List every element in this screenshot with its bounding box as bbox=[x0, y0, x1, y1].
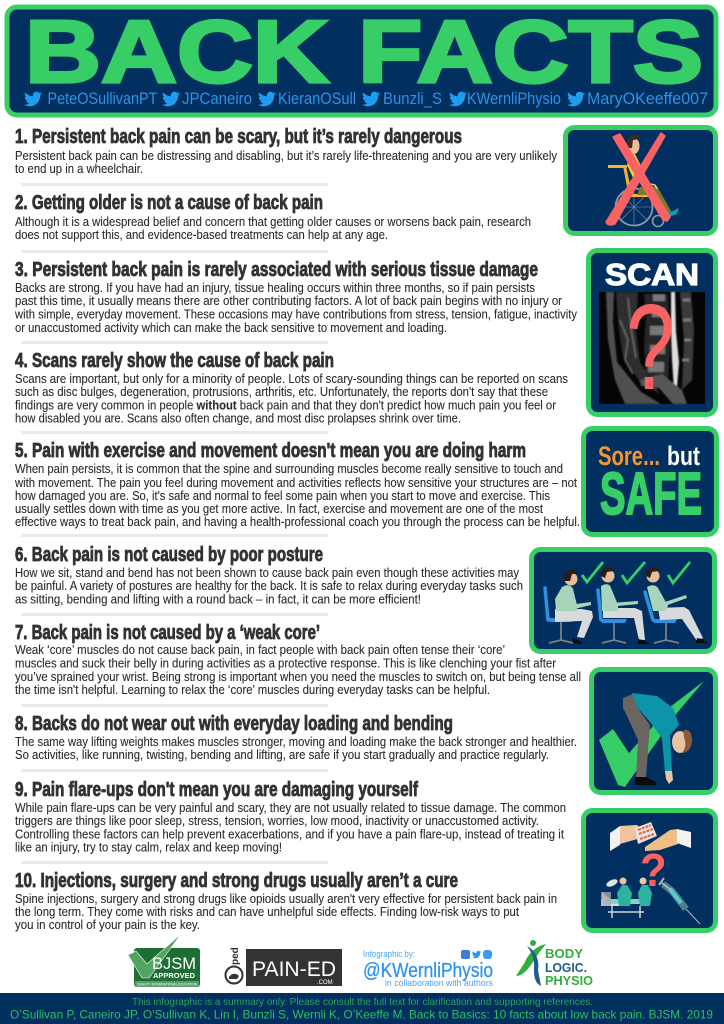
twitter handles: PeteOSullivanPT bbox=[48, 89, 158, 108]
scan heading: SCAN bbox=[605, 257, 699, 292]
fact 8: The same way lifting weights makes muscles stronger, moving and loading make the back stronger and healthier. bbox=[15, 735, 577, 749]
twitter handles: KieranOSull bbox=[278, 89, 356, 108]
fact 1 bbox=[15, 126, 558, 176]
fact 5: When pain persists, it is common that the spine and surrounding muscles become really sensitive to touch and bbox=[15, 462, 563, 476]
logo: Body Logic Physio bbox=[516, 940, 593, 988]
icon: surgical team bbox=[601, 878, 652, 918]
MRI image bbox=[599, 292, 705, 404]
fact 5: how damaged you are. So, it's safe and normal to feel some pain when you start to move and exercise. This bbox=[15, 489, 550, 503]
logo: BJSM approved bbox=[128, 934, 200, 987]
fact 3 bbox=[14, 259, 578, 335]
panel: wheelchair crossed out bbox=[566, 128, 716, 234]
icon: hand with pills bbox=[610, 822, 691, 851]
fact 6 bbox=[15, 544, 523, 606]
footer bar: This infographic is a summary only. Please consult the full text for clarification and supporting references. bbox=[132, 996, 593, 1008]
logo: Pain-Ed: .COM bbox=[317, 980, 333, 986]
logo: BJSM approved: QUALITY INTERNATIONAL EDUCATION bbox=[137, 982, 197, 986]
logo: BJSM approved: APPROVED bbox=[153, 973, 195, 980]
fact 5: usually settles down with time as you get more active. In fact, exercise and movement are one of the most bbox=[15, 502, 543, 516]
fact 8 bbox=[15, 713, 577, 762]
fact 10: the long term. They come with risks and can have unhelpful side effects. Finding low-risk ways to put bbox=[15, 905, 519, 919]
logo: Body Logic Physio: LOGIC. bbox=[545, 960, 587, 975]
fact 7: muscles and suck their belly in during activities as a protective response. This is like clenching your fist after bbox=[15, 656, 556, 670]
fact 7: the time isn't helpful. Learning to relax the ‘core’ muscles during everyday tasks can be helpful. bbox=[15, 683, 490, 697]
fact 10: you in control of your pain is the key. bbox=[15, 918, 200, 932]
credit: infographic by: Infographic by: bbox=[363, 949, 415, 960]
fact 3: Backs are strong. If you have had an injury, tissue healing occurs within three months, so if pain persists bbox=[15, 281, 535, 295]
fact 10 bbox=[15, 870, 557, 932]
fact 10: Spine injections, surgery and strong drugs like opioids usually aren't very effective for persistent back pain in bbox=[15, 892, 557, 906]
fact 1: 1. Persistent back pain can be scary, but it’s rarely dangerous bbox=[15, 126, 462, 148]
question mark: ? bbox=[640, 844, 667, 896]
credit: infographic by: @KWernliPhysio bbox=[363, 960, 493, 982]
logo: Body Logic Physio: PHYSIO bbox=[545, 973, 593, 988]
logo: Body Logic Physio: BODY bbox=[545, 946, 583, 961]
icon: bending person bbox=[623, 693, 692, 785]
title: BACK FACTS bbox=[25, 2, 703, 101]
but text: but bbox=[667, 441, 700, 471]
fact 5: with movement. The pain you feel during movement and activities reflects how sensitive your structures are – not bbox=[14, 476, 577, 490]
twitter handles: MaryOKeeffe007 bbox=[587, 89, 708, 108]
credit: infographic by bbox=[363, 949, 493, 989]
fact 2: Although it is a widespread belief and concern that getting older causes or worsens back pain, research bbox=[15, 215, 531, 229]
figure: reclined sitter bbox=[645, 562, 708, 643]
fact 6: be painful. A variety of postures are healthy for the back. It is safe to relax during everyday tasks such bbox=[15, 579, 523, 593]
footer bar: O’Sullivan P, Caneiro JP, O’Sullivan K, Lin I, Bunzli S, Wernli K, O’Keeffe M. Back to Basics: 10 facts about low back pain. BJSM. 2019 bbox=[10, 1008, 713, 1022]
panel: sore but safe bbox=[584, 428, 716, 534]
fact 4 bbox=[15, 350, 568, 426]
fact 3: with simple, everyday movement. These occasions may have contributions from stress, tension, fatigue, inactivity bbox=[14, 308, 578, 322]
logo: BJSM approved: BJSM bbox=[152, 954, 196, 973]
fact 3: past this time, it usually means there are other contributing factors. A lot of back pain begins with no injury or bbox=[15, 294, 562, 308]
panel: sitting postures bbox=[532, 550, 714, 652]
fact 5: effective ways to treat back pain, and having a health-professional coach you through the process can be helpful. bbox=[15, 515, 580, 529]
fact 7: 7. Back pain is not caused by a ‘weak core’ bbox=[15, 622, 320, 644]
fact 4: Scans are important, but only for a minority of people. Lots of scary-sounding things can be reported on scans bbox=[15, 372, 568, 386]
logo: Pain-Ed bbox=[226, 947, 342, 986]
fact 9: Controlling these factors can help prevent exacerbations, and if you have a pain flare-up, instead of treating it bbox=[15, 828, 564, 842]
fact 4: 4. Scans rarely show the cause of back pain bbox=[15, 350, 334, 372]
fact 6: as sitting, bending and lifting with a round back – in fact, it can be more efficient! bbox=[15, 592, 421, 606]
fact 3: or unaccustomed activity which can make the back sensitive to movement and loading. bbox=[15, 321, 447, 335]
fact 5 bbox=[14, 440, 580, 529]
fact 7: you’ve sprained your wrist. Being strong is important when you need the muscles to switch on, but being tense all bbox=[15, 670, 581, 684]
twitter handles bbox=[24, 89, 708, 108]
figure: slouched sitter bbox=[545, 562, 603, 644]
fact 4: such as disc bulges, degeneration, protrusions, arthritis, etc. Unfortunately, the reports don't say that these bbox=[15, 385, 548, 399]
icon: syringe bbox=[659, 878, 700, 924]
fact 9: While pain flare-ups can be very painful and scary, they are not usually related to tissue damage. The common bbox=[15, 801, 566, 815]
footer bar bbox=[0, 993, 724, 1024]
fact 3: 3. Persistent back pain is rarely associated with serious tissue damage bbox=[15, 259, 538, 281]
fact 4: findings are very common in people without back pain and that they don't predict how much pain you feel or bbox=[15, 398, 556, 412]
fact 1: to end up in a wheelchair. bbox=[15, 162, 143, 176]
fact 7 bbox=[15, 622, 581, 697]
fact 9: like an injury, try to stay calm, relax and keep moving! bbox=[15, 840, 282, 854]
fact 5: 5. Pain with exercise and movement doesn't mean you are doing harm bbox=[15, 440, 526, 462]
figure: upright sitter bbox=[598, 562, 650, 644]
logo: Pain-Ed: PAIN-ED bbox=[252, 958, 336, 981]
sore text: Sore... bbox=[598, 441, 660, 471]
fact 10: 10. Injections, surgery and strong drugs usually aren’t a cure bbox=[15, 870, 458, 892]
icon: red cross bbox=[606, 133, 670, 225]
panel: bending with tick bbox=[592, 670, 716, 792]
fact 1: Persistent back pain can be distressing and disabling, but it’s rarely life-threatening and you are very unlikely bbox=[15, 149, 558, 163]
fact 6: 6. Back pain is not caused by poor posture bbox=[15, 544, 323, 566]
panel: drugs, surgery, injections bbox=[584, 810, 716, 930]
fact 9 bbox=[15, 779, 566, 854]
fact 2: does not support this, and evidence-based treatments can help at any age. bbox=[15, 228, 388, 242]
credit: infographic by: in collaboration with authors bbox=[385, 978, 493, 989]
question mark: ? bbox=[626, 279, 675, 415]
fact 4: how disabled you are. Scans also often change, and most disc prolapses shrink over time. bbox=[15, 412, 461, 426]
logo: Pain-Ed: ped bbox=[230, 947, 241, 965]
icon: green tick bbox=[599, 681, 704, 787]
twitter handles: KWernliPhysio bbox=[467, 89, 561, 108]
twitter handles: Bunzli_S bbox=[383, 89, 442, 108]
fact 8: 8. Backs do not wear out with everyday loading and bending bbox=[15, 713, 453, 735]
header banner bbox=[7, 2, 716, 115]
fact 2 bbox=[15, 192, 531, 242]
fact 2: 2. Getting older is not a cause of back pain bbox=[15, 192, 323, 214]
fact 6: How we sit, stand and bend has not been shown to cause back pain even though these activities may bbox=[15, 566, 520, 580]
twitter handles: JPCaneiro bbox=[182, 89, 252, 108]
fact 9: triggers are things like poor sleep, stress, tension, worries, low mood, inactivity or unaccustomed activity. bbox=[15, 814, 539, 828]
panel: scan bbox=[588, 250, 716, 415]
fact 8: So activities, like running, twisting, bending and lifting, are safe if you start gradually and practice regularly. bbox=[15, 748, 549, 762]
fact 9: 9. Pain flare-ups don't mean you are damaging yourself bbox=[15, 779, 418, 801]
fact 7: Weak ‘core’ muscles do not cause back pain, in fact people with back pain often tense their ‘core’ bbox=[15, 643, 505, 657]
